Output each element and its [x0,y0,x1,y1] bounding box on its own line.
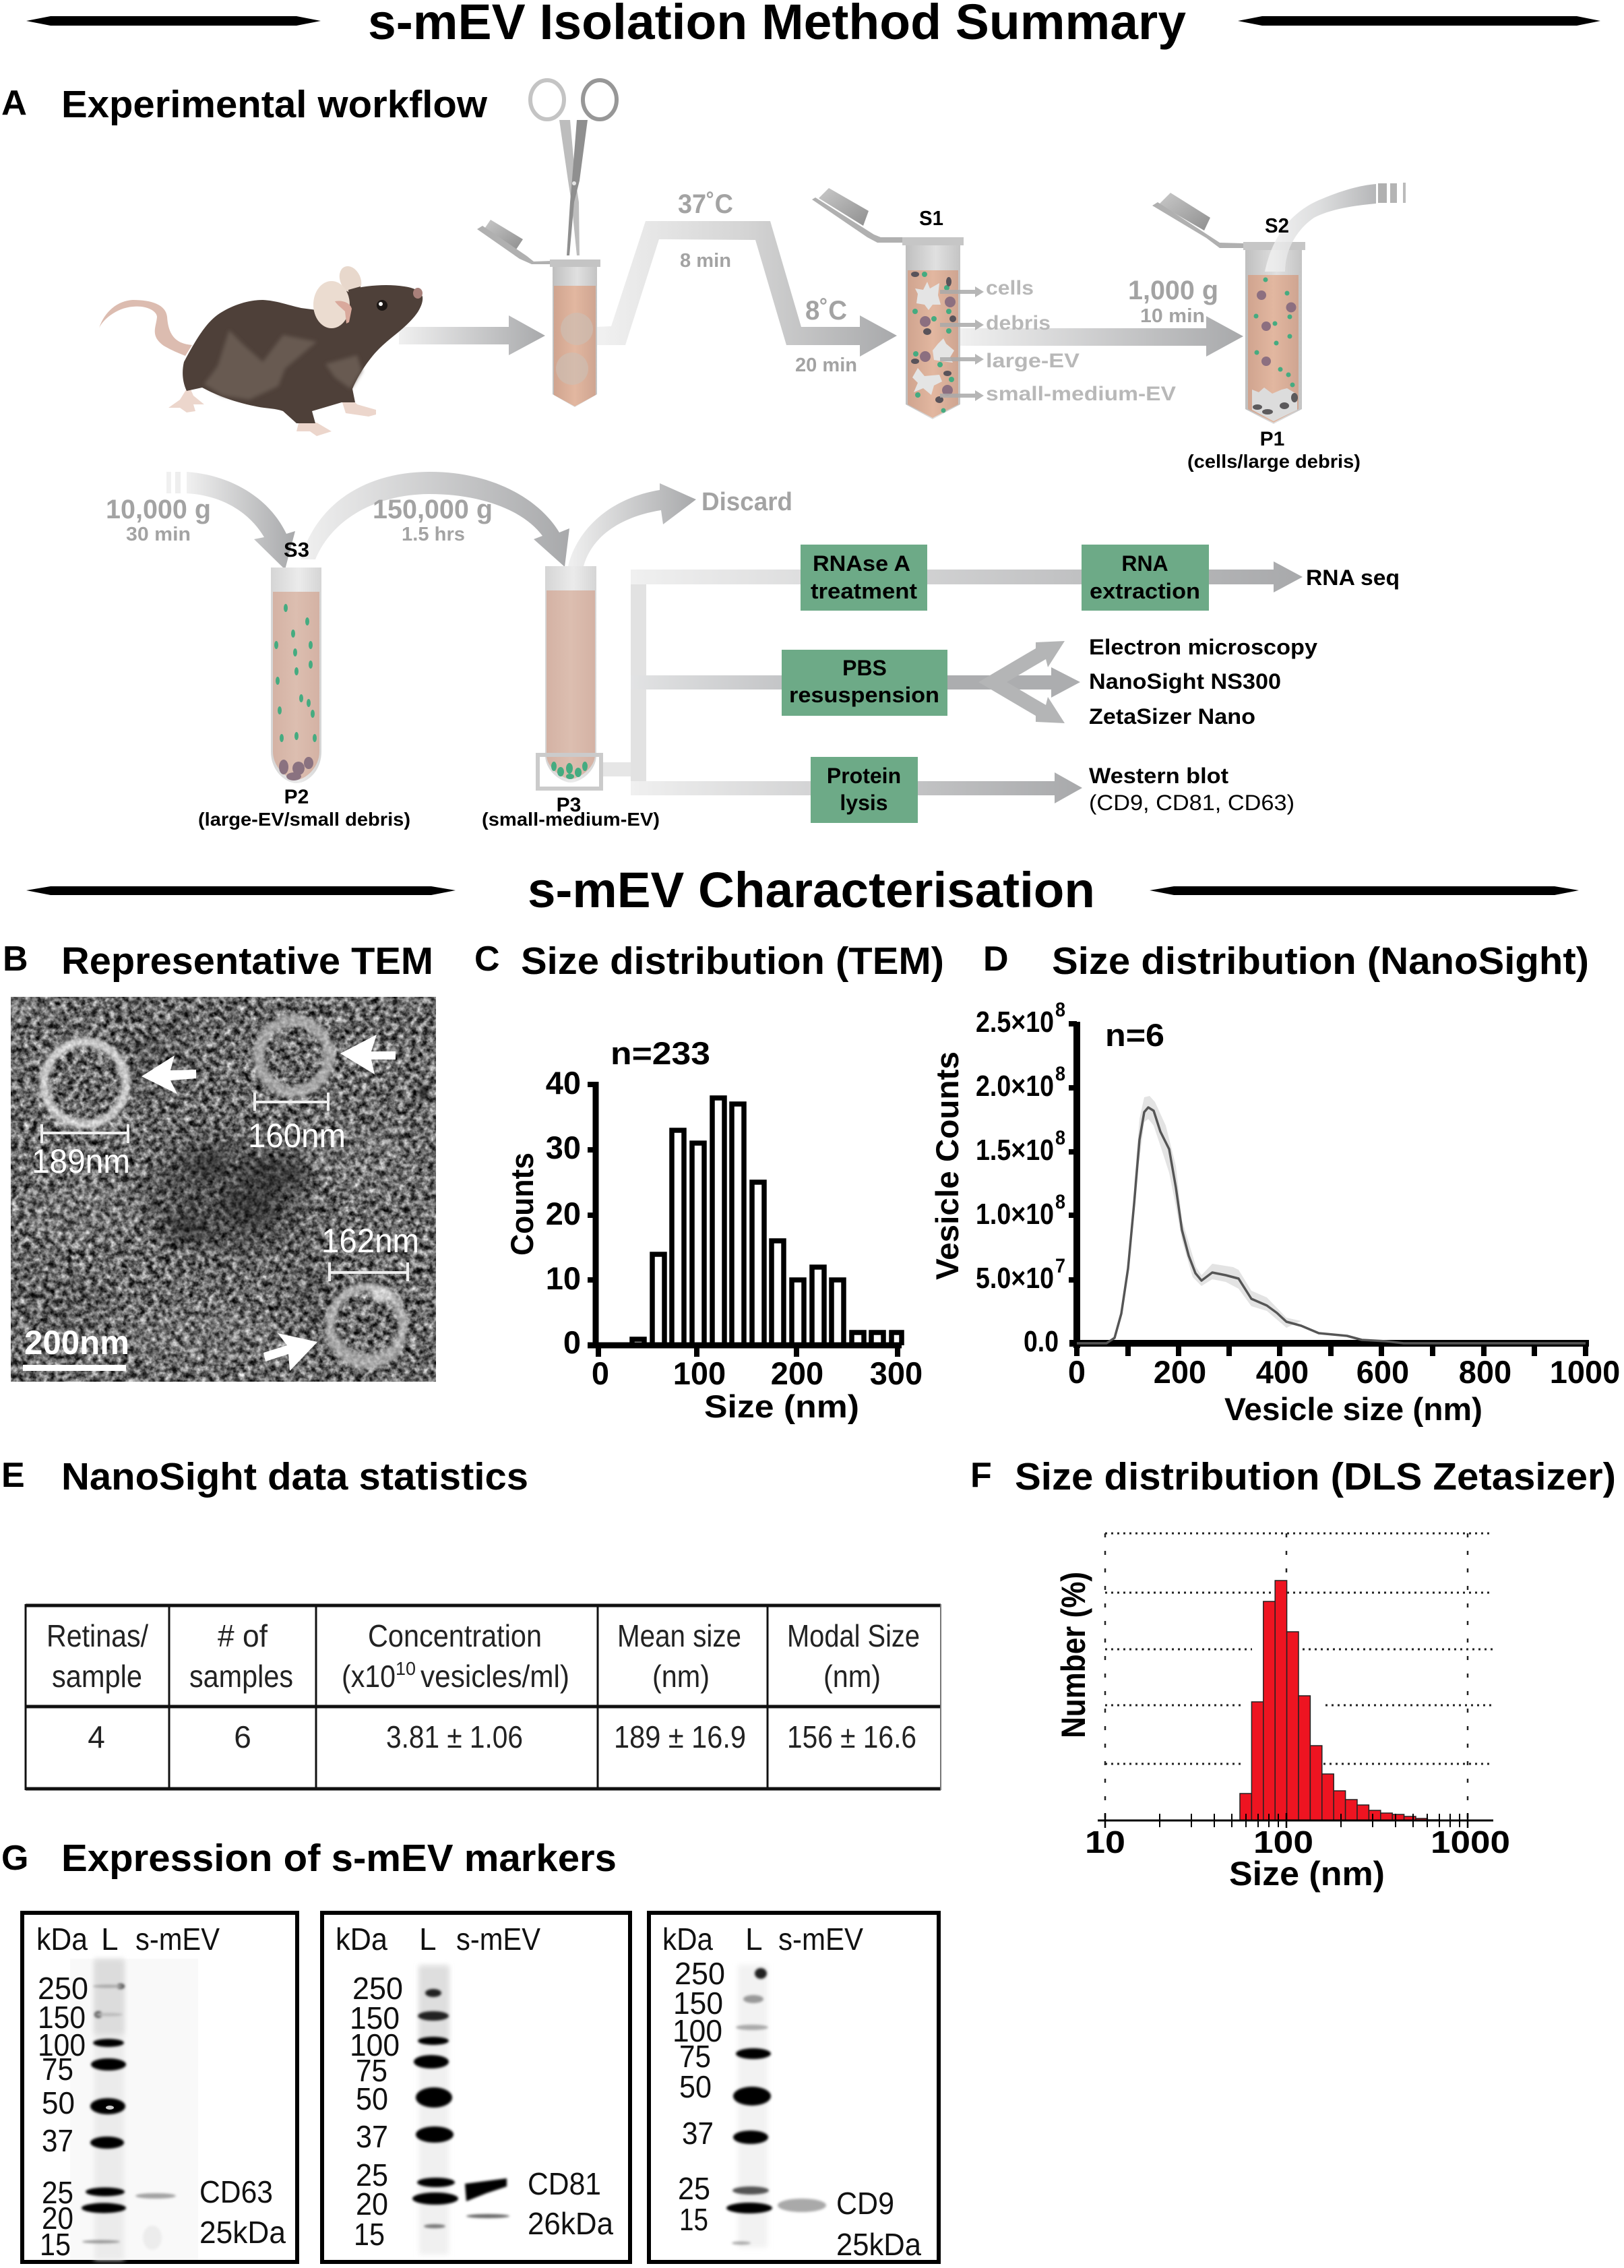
western blot: CD81: 25 [356,2157,388,2193]
box: Protein lysis: lysis [840,791,888,815]
heading D: D [983,940,1009,979]
statistics table: 156 ± 16.6 [787,1719,916,1754]
heading B: Representative TEM [61,940,433,983]
line chart: 8 [1055,1191,1065,1213]
arrow: discard [568,483,696,566]
western blot: CD63: 50 [42,2085,75,2120]
western blot: CD81: 100 [350,2027,400,2062]
western blot: CD63 [22,1913,297,2262]
TEM micrograph [7,997,436,1382]
outputs text: NanoSight NS300 [1089,669,1281,694]
statistics table: sample [52,1659,142,1694]
box: PBS resuspension: PBS [842,656,887,680]
label: 150,000 g, 1.5 hrs [373,495,493,545]
labels: tube S1 contents with pointer arrows: cells [986,277,1034,299]
label: 10,000 g, 30 min [106,495,211,545]
western blot: CD9: s-mEV [778,1922,863,1957]
western blot: CD9: 37 [682,2116,714,2151]
scale bar 200nm: 200nm [24,1324,129,1361]
TEM arrows [142,1035,396,1371]
arrow: 150,000 g into P3 [301,472,569,567]
histogram [504,1035,923,1424]
panel C: size distribution TEM [474,940,944,1424]
label: P2: (large-EV/small debris) [198,809,410,830]
panel G: expression of s-mEV markers [1,1837,939,2262]
label: 10,000 g, 30 min: 10,000 g [106,495,211,524]
labels: tube S1 contents with pointer arrows: debris [986,312,1051,334]
panel B: representative TEM [3,940,436,1382]
label: 150,000 g, 1.5 hrs: 150,000 g [373,495,493,524]
histogram: 20 [546,1196,581,1231]
line chart: 200 [1154,1354,1206,1390]
histogram: 30 [546,1130,581,1165]
histogram: 100 [1253,1825,1313,1860]
label: 150,000 g, 1.5 hrs: 1.5 hrs [402,524,465,545]
statistics table [26,1604,941,1790]
western blot: CD9: 25kDa [836,2227,921,2262]
box: Protein lysis [811,757,918,823]
title: s-mEV Isolation Method Summary [26,0,1600,50]
label: P3: (small-medium-EV) [482,809,660,830]
label: 8C, 20 min: 8˚C [805,296,847,326]
outputs text: Western blot [1089,764,1228,788]
western blot: CD81: CD81 [528,2166,601,2201]
line chart: 7 [1055,1255,1065,1277]
western blot: CD9: 100 [673,2013,722,2048]
panel E: NanoSight data statistics [1,1455,941,1790]
statistics table: 10 [396,1658,416,1679]
heading B: B [3,940,28,979]
line chart: 800 [1459,1354,1511,1390]
western blot: CD9: 15 [679,2202,708,2237]
branching lines and arrows [603,561,1303,803]
western blot: CD9: kDa [662,1922,713,1957]
statistics table: (nm) [652,1659,710,1694]
histogram: 0 [592,1355,609,1391]
box: RNA extraction: extraction [1090,579,1200,603]
western blot: CD9: L [745,1922,763,1957]
western blot: CD63: 100 [38,2027,86,2062]
label: P3 [482,794,660,830]
histogram: 100 [673,1355,726,1391]
box: PBS resuspension [782,650,947,716]
arrow: S2 supernatant out [1265,183,1406,272]
statistics table: 6 [234,1719,251,1754]
heading C: Size distribution (TEM) [521,940,944,983]
line chart: Vesicle size (nm) [1224,1391,1482,1427]
western blot: CD63: 20 [42,2201,73,2236]
text: 189nm: 189nm [32,1142,130,1180]
heading: s-mEV Characterisation: s-mEV Characterisation [528,862,1095,918]
label: 1,000 g, 10 min [1128,276,1218,327]
western blot: CD9 [649,1913,939,2262]
line chart: 1.0×10 [976,1198,1054,1231]
western blot: CD63: s-mEV [135,1922,220,1957]
vesicle 160nm [259,1020,329,1092]
label: discard: Discard [701,488,792,516]
heading A: A [1,84,27,123]
western blot: CD81: 26kDa [528,2206,613,2241]
box: RNA extraction [1082,545,1209,611]
histogram [1055,1533,1510,1893]
line chart: 1000 [1550,1354,1620,1390]
statistics table: (nm) [823,1659,881,1694]
line chart [929,999,1620,1427]
western blot: CD81: 250 [352,1971,403,2006]
label: P3: P3 [557,794,581,816]
labels: tube S1 contents with pointer arrows: large-EV [986,350,1080,372]
label: P2: P2 [284,786,309,808]
label: P2 [198,786,410,830]
vesicle 189nm [44,1042,126,1124]
histogram: Number (%) [1055,1572,1092,1738]
western blot: CD81: 15 [354,2217,385,2252]
western blot: CD81: s-mEV [456,1922,540,1957]
western blot: CD9: 250 [675,1956,725,1991]
tube: S3 with P2 pellet [271,568,321,783]
statistics table: Retinas/ [46,1618,148,1653]
label: P1 [1187,428,1361,472]
label: S3: S3 [284,538,309,561]
western blot: CD9: 50 [679,2069,712,2104]
label: 8C, 20 min [795,296,857,376]
TEM measurement labels [42,1093,408,1281]
western blot: CD9: 150 [673,1986,723,2021]
western blot: CD9: 75 [679,2039,711,2074]
line chart: 8 [1055,1127,1065,1149]
vesicle 162nm [330,1287,403,1364]
line chart: 8 [1055,999,1065,1021]
heading F: Size distribution (DLS Zetasizer) [1015,1455,1616,1498]
statistics table: Mean size [617,1618,741,1653]
tube: S2 [1152,193,1305,424]
histogram: n=233 [611,1035,710,1071]
heading G: G [1,1839,28,1878]
box: RNAse A treatment: treatment [811,579,917,603]
arrow: 10,000 g into S3 [166,472,295,570]
panel F: DLS Zetasizer [970,1455,1616,1893]
label: 1,000 g, 10 min: 10 min [1140,305,1205,327]
histogram: 200 [771,1355,823,1391]
line chart: 8 [1055,1063,1065,1085]
statistics table: # of [218,1618,268,1653]
statistics table: Modal Size [787,1618,920,1653]
western blot: CD63: 25kDa [199,2215,286,2250]
label: 10,000 g, 30 min: 30 min [126,524,191,545]
arrow: mouse to tube [399,315,545,355]
arrow: 1,000 g [960,316,1243,357]
histogram: Size (nm) [1229,1855,1385,1893]
western blot: CD63: 250 [38,1971,88,2006]
western blot: CD63: L [101,1922,119,1957]
heading E: NanoSight data statistics [61,1455,528,1498]
histogram: Counts [504,1153,540,1256]
label: P1: P1 [1260,428,1284,450]
box: PBS resuspension: resuspension [789,683,939,707]
line chart: Vesicle Counts [929,1051,965,1280]
line chart: 400 [1256,1354,1309,1390]
box: RNAse A treatment: RNAse A [813,551,910,576]
western blot: CD63: CD63 [199,2174,273,2209]
western blot: CD63: 15 [40,2227,71,2262]
western blot: CD63: 150 [38,2000,86,2035]
western blot: CD81: 75 [356,2053,387,2088]
statistics table: Concentration [368,1618,542,1653]
label: 1,000 g, 10 min: 1,000 g [1128,276,1218,305]
western blot: CD9: 25 [678,2171,710,2206]
label: 37C, 8 min: 8 min [680,250,731,272]
text: 162nm: 162nm [321,1222,419,1260]
statistics table: 189 ± 16.9 [614,1719,746,1754]
western blot: CD9: CD9 [836,2186,894,2221]
outputs text: Electron microscopy [1089,635,1317,659]
statistics table: vesicles/ml) [420,1659,569,1694]
outputs text [1089,565,1400,815]
histogram: Size (nm) [704,1388,859,1424]
outputs text: ZetaSizer Nano [1089,704,1255,729]
label: S1: S1 [919,206,943,230]
heading: s-mEV Characterisation [26,862,1579,918]
tube: S1 [812,188,964,419]
western blot: CD81 [322,1913,630,2262]
histogram: 10 [1085,1825,1125,1860]
histogram: 1000 [1431,1825,1510,1860]
line chart: 2.0×10 [976,1070,1054,1103]
statistics table: (x10 [342,1659,396,1694]
box: Protein lysis: Protein [827,764,901,788]
line chart: 0.0 [1024,1325,1059,1358]
label: P1: (cells/large debris) [1187,451,1361,472]
label: 37C, 8 min: 37˚C [678,189,733,219]
panel D: size distribution NanoSight [929,940,1620,1427]
heading E: E [1,1456,25,1495]
western blot: CD81: kDa [336,1922,387,1957]
labels: tube S1 contents with pointer arrows [940,277,1176,405]
panel A: experimental workflow [1,80,1406,830]
western blot: CD81: 20 [356,2186,388,2221]
histogram: 300 [870,1355,923,1391]
heading A: Experimental workflow [61,83,488,126]
western blot: CD81: 150 [350,2000,400,2035]
heading F: F [970,1456,992,1495]
histogram: 40 [546,1065,581,1101]
line chart: 1.5×10 [976,1134,1054,1167]
heading D: Size distribution (NanoSight) [1052,940,1589,983]
label: 8C, 20 min: 20 min [795,355,857,376]
statistics table: samples [189,1659,293,1694]
western blot: CD81: 50 [356,2081,388,2116]
histogram: 10 [546,1260,581,1296]
text: 160nm: 160nm [248,1117,346,1155]
line chart: 2.5×10 [976,1006,1054,1039]
line chart: 600 [1356,1354,1409,1390]
outputs text: RNA seq [1306,565,1400,590]
statistics table: 4 [88,1719,105,1754]
labels: tube S1 contents with pointer arrows: small-medium-EV [986,383,1176,405]
histogram: 0 [563,1324,581,1360]
western blot: CD63: 37 [42,2123,73,2158]
tube: P3 with pellet [538,566,601,789]
line chart: 0 [1068,1354,1086,1390]
western blot: CD81: 37 [356,2119,388,2154]
line chart: 5.0×10 [976,1262,1054,1295]
label: S2: S2 [1265,214,1289,237]
icon: scissors [530,80,617,255]
western blot: CD63: 75 [42,2052,73,2087]
western blot: CD81: L [419,1922,437,1957]
outputs text: (CD9, CD81, CD63) [1089,791,1294,815]
western blot: CD63: kDa [36,1922,88,1957]
western blot: CD63: 25 [42,2175,73,2210]
label: 37C, 8 min [678,189,733,272]
line chart: n=6 [1105,1017,1164,1053]
heading G: Expression of s-mEV markers [61,1837,617,1880]
icon: mouse [99,263,423,436]
tube: tissue with retinas [477,220,600,407]
box: RNAse A treatment [801,545,927,611]
heading C: C [474,940,500,979]
statistics table: 3.81 ± 1.06 [386,1719,523,1754]
box: RNA extraction: RNA [1121,551,1168,576]
process path: 37C to 8C [597,221,897,357]
